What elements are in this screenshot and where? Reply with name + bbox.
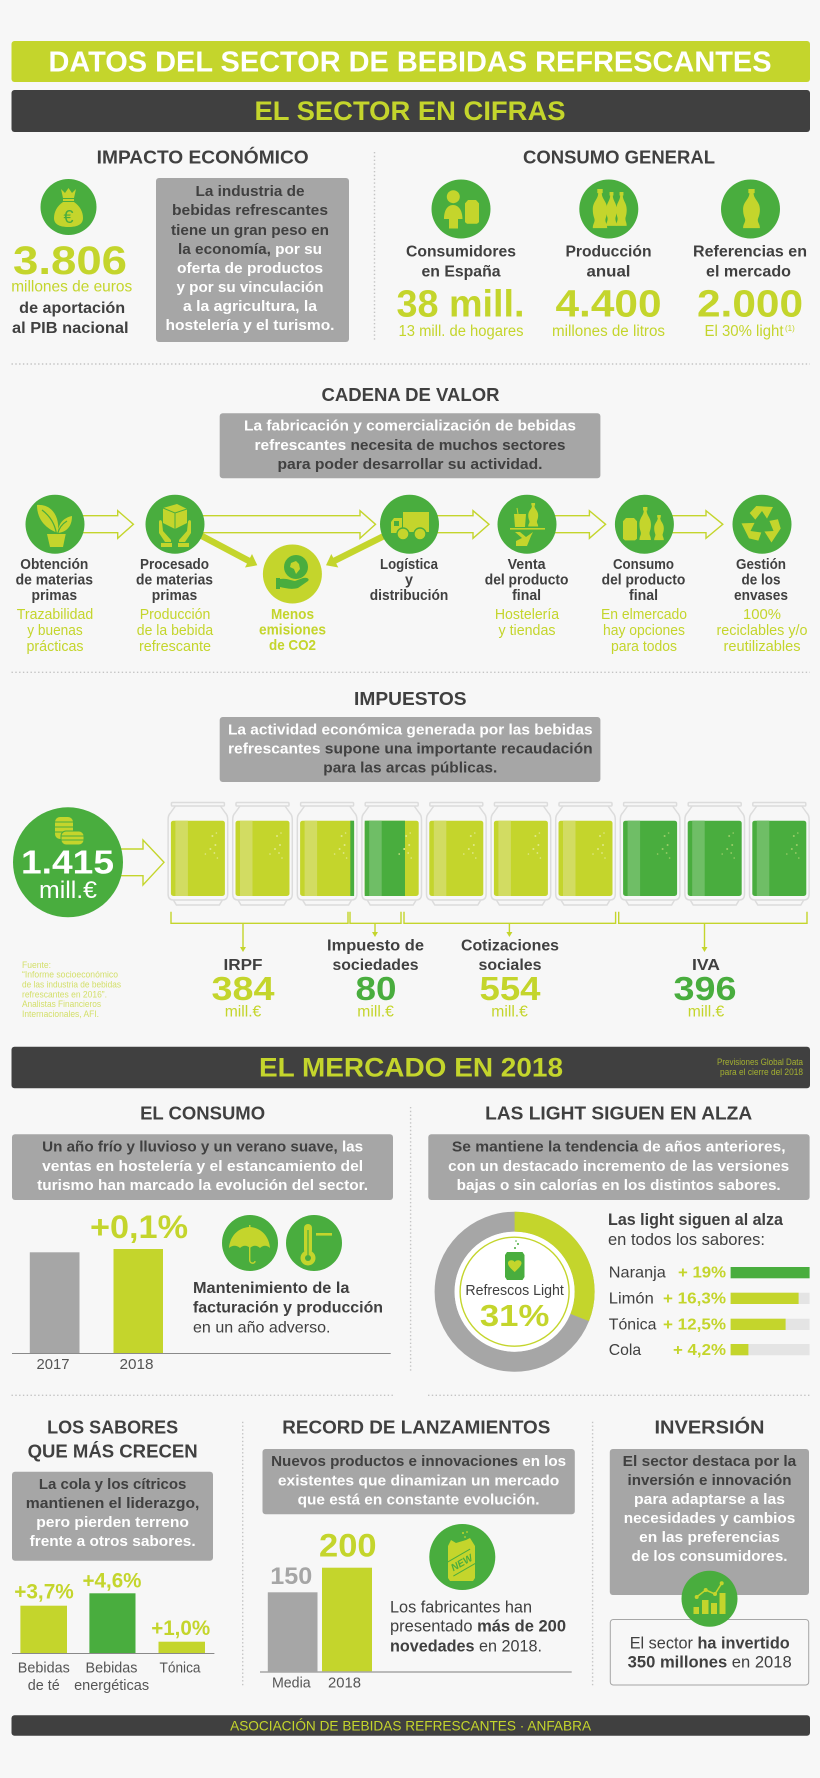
bar chart: consumo: 2018 xyxy=(120,1356,154,1373)
step: venta del producto final: Hostelería xyxy=(495,606,560,623)
panel: el consumo xyxy=(12,1103,393,1373)
section banner: el mercado en 2018: Previsiones Global Data xyxy=(717,1057,804,1068)
callout: la cola y los citricos xyxy=(12,1472,213,1561)
arrow: materias to procesado xyxy=(80,511,133,538)
arrow: procesado to emisiones xyxy=(200,535,257,568)
row: naranja xyxy=(609,1264,810,1281)
icon: box with hands xyxy=(146,495,204,554)
text: produccion anual xyxy=(566,244,652,281)
row: naranja: + 19% xyxy=(678,1264,726,1281)
callout box: ha invertido xyxy=(610,1620,809,1685)
step: obtencion de materias primas xyxy=(16,557,93,655)
chart: ten cans xyxy=(168,802,809,905)
callout: el sector destaca: en las preferencias xyxy=(639,1529,780,1546)
panel: las light siguen en alza xyxy=(428,1103,810,1362)
heading: los sabores xyxy=(28,1417,198,1462)
text: mantenimiento: Mantenimiento de la xyxy=(193,1280,350,1297)
section banner: el mercado en 2018: para el cierre del 2018 xyxy=(720,1067,803,1078)
callout: nuevos productos: existentes que dinamizan un mercado xyxy=(278,1472,559,1489)
text: millones de litros: millones de litros xyxy=(552,323,665,340)
callout: se mantiene la tendencia: con un destacado incremento de las versiones xyxy=(448,1158,789,1175)
callout: la industria: la economía, por su xyxy=(178,241,322,258)
callout: se mantiene la tendencia xyxy=(428,1134,810,1200)
callout: un ano frio: turismo han marcado la evolución del sector. xyxy=(37,1177,368,1194)
callout: la industria: oferta de productos xyxy=(177,260,323,277)
text: referencias en el mercado xyxy=(693,244,807,281)
donut chart: refrescos light 31%: 31% xyxy=(480,1298,549,1333)
callout: el sector destaca xyxy=(610,1449,809,1595)
text: consumidores en espana xyxy=(406,244,516,281)
callout: nuevos productos xyxy=(262,1449,575,1514)
step: gestion de los envases: Gestión xyxy=(736,557,786,573)
arrow: total to cans xyxy=(118,840,164,885)
panel: inversion xyxy=(610,1416,809,1685)
step: menos emisiones: emisiones xyxy=(259,622,326,638)
tax: iva: 396 xyxy=(674,970,736,1007)
callout: el sector destaca: inversión e innovación xyxy=(628,1472,792,1489)
arrow: procesado to logistica xyxy=(200,511,376,538)
step: gestion de los envases: reciclables y/o xyxy=(716,622,808,639)
step: venta del producto final: del producto xyxy=(485,572,569,588)
step: consumo del producto final xyxy=(601,557,687,655)
icon: bottle xyxy=(721,180,780,238)
bar chart: sabores: Bebidas xyxy=(18,1660,70,1677)
callout: la industria: La industria de xyxy=(196,183,304,200)
callout: fabricacion: La fabricación y comercialización de bebidas xyxy=(244,418,576,435)
bar chart: sabores: Tónica xyxy=(160,1660,201,1677)
step: consumo del producto final: hay opciones xyxy=(603,622,685,639)
icon: new can: NEW xyxy=(449,1552,476,1574)
source note: Analistas Financieros xyxy=(22,999,101,1010)
tax: cotizaciones sociales xyxy=(461,938,559,1021)
tax: cotizaciones sociales: 554 xyxy=(480,970,541,1007)
callout: fabricacion: refrescantes necesita de muchos sectores xyxy=(254,437,566,454)
arrow: logistica to venta xyxy=(434,511,489,538)
heading: las light: LAS LIGHT SIGUEN EN ALZA xyxy=(485,1103,752,1123)
icon: recycle xyxy=(732,495,792,554)
icon: money bag xyxy=(40,179,96,235)
callout: la industria: hostelería y el turismo. xyxy=(166,317,334,334)
step: gestion de los envases: 100% xyxy=(743,606,781,623)
callout: la cola y los citricos: frente a otros sabores. xyxy=(30,1533,196,1550)
icon: thermometer xyxy=(286,1215,342,1271)
icon: growth chart xyxy=(682,1571,738,1627)
icon: new can xyxy=(429,1524,495,1590)
heading: impuestos: IMPUESTOS xyxy=(354,689,467,709)
callout: el sector destaca: necesidades y cambios xyxy=(624,1510,795,1527)
tax: cotizaciones sociales: sociales xyxy=(478,957,542,974)
callout: el sector destaca: para adaptarse a las xyxy=(634,1491,785,1508)
step: venta del producto final: final xyxy=(512,588,541,604)
donut chart: refrescos light 31%: Refrescos Light xyxy=(465,1282,565,1299)
row: naranja: Naranja xyxy=(609,1264,666,1281)
callout: actividad economica: para las arcas públicas. xyxy=(323,759,497,776)
tax: impuesto de sociedades: sociedades xyxy=(332,957,419,974)
figure: 2.000: 2.000 xyxy=(697,284,803,326)
step: procesado de materias primas: refrescante xyxy=(139,638,211,655)
section banner: el mercado en 2018 xyxy=(12,1047,810,1088)
text: referencias en el mercado: el mercado xyxy=(706,264,791,281)
step: menos emisiones: de CO2 xyxy=(269,637,316,654)
row: tonica: + 12,5% xyxy=(663,1316,726,1333)
step: consumo del producto final: Consumo xyxy=(613,557,674,573)
text: el 30% light: El 30% light xyxy=(704,323,784,340)
tax: irpf: mill.€ xyxy=(225,1004,261,1021)
text: produccion anual: anual xyxy=(586,264,630,281)
row: cola: + 4,2% xyxy=(673,1342,726,1359)
step: gestion de los envases xyxy=(716,557,808,655)
tax: impuesto de sociedades: 80 xyxy=(356,970,396,1007)
heading: record: RECORD DE LANZAMIENTOS xyxy=(282,1417,550,1437)
callout: nuevos productos: Nuevos productos e innovaciones en los xyxy=(271,1453,566,1470)
source note: refrescantes en 2016”. xyxy=(22,989,107,1000)
step: logistica y distribucion: distribución xyxy=(370,588,448,604)
source note: Internacionales, AFI. xyxy=(22,1009,99,1020)
text: mantenimiento: facturación y producción xyxy=(193,1300,383,1317)
callout: la industria: tiene un gran peso en xyxy=(171,222,329,239)
callout: nuevos productos: que está en constante evolución. xyxy=(298,1491,540,1508)
step: procesado de materias primas: primas xyxy=(152,588,197,604)
bar chart: sabores xyxy=(12,1569,214,1694)
figure: 38 mill: 38 mill. xyxy=(396,284,524,326)
tax: irpf xyxy=(212,957,275,1021)
bar chart: lanzamientos xyxy=(260,1528,572,1692)
bar chart: consumo: 2017 xyxy=(36,1356,70,1373)
icon: money bag: € xyxy=(63,207,74,227)
bar chart: lanzamientos: 200 xyxy=(319,1528,377,1564)
callout: el sector destaca: de los consumidores. xyxy=(632,1548,788,1565)
step: obtencion de materias primas: Obtención xyxy=(20,557,88,573)
text: el 30% light: (1) xyxy=(785,324,795,333)
footer bar: ASOCIACIÓN DE BEBIDAS REFRESCANTES · ANFABRA xyxy=(230,1718,592,1734)
icon: bottles xyxy=(579,180,638,238)
text: al pib nacional: al PIB nacional xyxy=(12,320,129,337)
arrow: logistica to emisiones xyxy=(326,535,386,568)
section banner: el sector en cifras xyxy=(12,90,810,132)
heading: consumo general: CONSUMO GENERAL xyxy=(523,148,715,168)
step: venta del producto final xyxy=(485,557,569,639)
callout: la cola y los citricos: mantienen el liderazgo, xyxy=(26,1495,199,1512)
step: obtencion de materias primas: Trazabilidad xyxy=(17,606,93,623)
text: mantenimiento xyxy=(193,1280,383,1337)
total circle 1.415 mill euro xyxy=(13,807,123,917)
tax: iva: mill.€ xyxy=(688,1004,724,1021)
callout box: ha invertido: El sector ha invertido xyxy=(630,1634,790,1652)
bracket arrow: cotizaciones xyxy=(404,912,616,937)
heading: impacto economico: IMPACTO ECONÓMICO xyxy=(97,146,309,168)
step: venta del producto final: y tiendas xyxy=(498,622,556,639)
callout: la cola y los citricos: pero pierden terreno xyxy=(36,1514,189,1531)
bracket arrow: sociedades xyxy=(350,912,401,937)
tax: iva: IVA xyxy=(692,957,720,974)
row: tonica xyxy=(609,1316,810,1333)
tax: impuesto de sociedades: mill.€ xyxy=(357,1004,394,1021)
step: menos emisiones xyxy=(259,606,326,654)
bar chart: lanzamientos: 2018 xyxy=(328,1675,361,1692)
icon: globe in hand xyxy=(263,544,322,604)
step: obtencion de materias primas: de materias xyxy=(16,572,93,588)
step: obtencion de materias primas: prácticas xyxy=(26,638,84,655)
donut chart: refrescos light 31% xyxy=(445,1222,585,1362)
figure: 3.806: 3.806 xyxy=(13,239,127,283)
panel: consumo general xyxy=(396,148,807,340)
bar chart: lanzamientos: Media xyxy=(272,1675,311,1692)
row: cola xyxy=(609,1342,810,1359)
callout: actividad economica xyxy=(220,717,600,782)
callout: la industria: y por su vinculación xyxy=(176,279,324,296)
text: produccion anual: Producción xyxy=(566,244,652,261)
tax: impuesto de sociedades xyxy=(327,938,424,1021)
icon: coins xyxy=(55,817,84,845)
step: logistica y distribucion: y xyxy=(405,572,413,588)
step: gestion de los envases: de los xyxy=(742,572,780,588)
bar chart: consumo: +0,1% xyxy=(90,1209,188,1245)
figure: 4.400: 4.400 xyxy=(556,284,662,326)
source note: “Informe socioeconómico xyxy=(22,970,118,981)
panel: cadena de valor xyxy=(16,385,808,655)
text: los fabricantes xyxy=(390,1597,566,1656)
text: consumidores en espana: en España xyxy=(422,264,501,281)
text: referencias en el mercado: Referencias en xyxy=(693,244,807,261)
total circle 1.415 mill euro: mill.€ xyxy=(39,877,98,904)
text: millones de euros: millones de euros xyxy=(11,279,132,296)
text: consumidores en espana: Consumidores xyxy=(406,244,516,261)
heading: los sabores: LOS SABORES xyxy=(47,1417,178,1437)
callout: se mantiene la tendencia: bajas o sin calorías en los distintos sabores. xyxy=(457,1177,781,1194)
step: procesado de materias primas xyxy=(136,557,214,655)
callout: actividad economica: La actividad económica generada por las bebidas xyxy=(228,721,593,738)
row: limon xyxy=(609,1290,810,1307)
text: las light siguen al alza: en todos los sabores: xyxy=(608,1231,765,1249)
step: consumo del producto final: final xyxy=(629,588,658,604)
step: gestion de los envases: reutilizables xyxy=(724,638,800,655)
tax: irpf: 384 xyxy=(212,970,275,1007)
step: procesado de materias primas: de la bebida xyxy=(137,622,214,639)
callout: el sector destaca: El sector destaca por la xyxy=(623,1453,797,1470)
step: logistica y distribucion xyxy=(370,557,448,604)
bar chart: sabores: energéticas xyxy=(74,1677,149,1694)
total circle 1.415 mill euro: 1.415 xyxy=(21,843,114,880)
heading: inversion: INVERSIÓN xyxy=(654,1416,764,1437)
title banner: DATOS DEL SECTOR DE BEBIDAS REFRESCANTES xyxy=(48,47,772,79)
bar chart: sabores: de té xyxy=(28,1677,60,1694)
arrow: venta to consumo xyxy=(551,511,606,538)
source note: Fuente: xyxy=(22,960,51,971)
text: las light siguen al alza xyxy=(608,1211,784,1249)
callout: un ano frio: Un año frío y lluvioso y un verano suave, las xyxy=(42,1139,363,1156)
panel: los sabores que mas crecen xyxy=(12,1417,214,1694)
tax: iva xyxy=(674,957,736,1021)
icon: tray with drinks xyxy=(498,495,556,554)
row: limon: + 16,3% xyxy=(663,1290,726,1307)
step: logistica y distribucion: Logística xyxy=(380,557,439,573)
tax: cotizaciones sociales: Cotizaciones xyxy=(461,938,559,955)
bracket arrow: irpf xyxy=(171,912,348,952)
tax: impuesto de sociedades: Impuesto de xyxy=(327,938,424,955)
icon: light can xyxy=(505,1240,524,1280)
row: limon: Limón xyxy=(609,1290,654,1307)
callout: actividad economica: refrescantes supone una importante recaudación xyxy=(228,740,593,757)
bar chart: sabores: +3,7% xyxy=(14,1580,74,1603)
step: procesado de materias primas: Procesado xyxy=(140,557,209,573)
panel: impacto economico xyxy=(11,146,349,342)
step: gestion de los envases: envases xyxy=(734,588,788,604)
text: los fabricantes: presentado más de 200 xyxy=(390,1617,566,1636)
text: los fabricantes: novedades en 2018. xyxy=(390,1637,542,1656)
callout: fabricacion: para poder desarrollar su actividad. xyxy=(278,456,542,473)
callout: fabricacion xyxy=(220,413,600,478)
text: de aportacion: de aportación xyxy=(19,300,125,317)
row: cola: Cola xyxy=(609,1342,641,1359)
callout: la industria: bebidas refrescantes xyxy=(172,202,328,219)
step: procesado de materias primas: Producción xyxy=(140,606,210,623)
callout: se mantiene la tendencia: Se mantiene la tendencia de años anteriores, xyxy=(452,1139,786,1156)
footer bar xyxy=(12,1715,810,1736)
source note: de las industria de bebidas xyxy=(22,980,121,990)
section banner: el mercado en 2018: EL MERCADO EN 2018 xyxy=(259,1053,563,1083)
section banner: el sector en cifras: EL SECTOR EN CIFRAS xyxy=(254,96,566,126)
panel: record de lanzamientos xyxy=(260,1417,575,1692)
step: menos emisiones: Menos xyxy=(271,606,314,623)
heading: cadena de valor: CADENA DE VALOR xyxy=(322,385,500,405)
arrow: consumo to gestion xyxy=(669,511,723,538)
callout: la industria xyxy=(156,178,349,342)
text: los fabricantes: Los fabricantes han xyxy=(390,1597,532,1616)
bar chart: sabores: +1,0% xyxy=(151,1617,211,1640)
heading: el consumo: EL CONSUMO xyxy=(140,1103,265,1123)
heading: los sabores: QUE MÁS CRECEN xyxy=(28,1441,198,1462)
text: mantenimiento: en un año adverso. xyxy=(193,1320,330,1337)
bar chart: consumo xyxy=(12,1209,391,1373)
panel: impuestos xyxy=(13,689,809,1021)
icon: can and bottles xyxy=(615,495,674,554)
step: obtencion de materias primas: y buenas xyxy=(27,622,83,639)
step: obtencion de materias primas: primas xyxy=(32,588,77,604)
text: las light siguen al alza: Las light siguen al alza xyxy=(608,1211,784,1229)
step: consumo del producto final: En elmercado xyxy=(601,606,687,623)
step: consumo del producto final: del producto xyxy=(602,572,685,588)
bar chart: sabores: +4,6% xyxy=(82,1569,142,1592)
icon: truck xyxy=(380,495,439,554)
icon: consumer and can xyxy=(432,180,490,238)
icon: umbrella xyxy=(222,1215,278,1271)
bracket arrow: iva xyxy=(619,912,807,952)
bar chart: sabores: Bebidas xyxy=(86,1660,138,1677)
callout box: ha invertido: 350 millones en 2018 xyxy=(628,1654,792,1672)
row: tonica: Tónica xyxy=(609,1316,656,1333)
step: venta del producto final: Venta xyxy=(508,557,547,573)
callout: la cola y los citricos: La cola y los cítricos xyxy=(39,1476,186,1493)
source note xyxy=(22,960,121,1020)
tax: cotizaciones sociales: mill.€ xyxy=(491,1004,528,1021)
callout: un ano frio xyxy=(12,1134,393,1200)
step: procesado de materias primas: de materias xyxy=(136,572,213,588)
callout: un ano frio: ventas en hostelería y el estancamiento del xyxy=(42,1158,363,1175)
tax: irpf: IRPF xyxy=(224,957,263,974)
text: hogares: 13 mill. de hogares xyxy=(398,323,524,340)
icon: plant xyxy=(26,495,84,554)
callout: la industria: a la agricultura, la xyxy=(183,298,318,315)
step: consumo del producto final: para todos xyxy=(611,638,677,655)
bar chart: lanzamientos: 150 xyxy=(270,1563,312,1590)
